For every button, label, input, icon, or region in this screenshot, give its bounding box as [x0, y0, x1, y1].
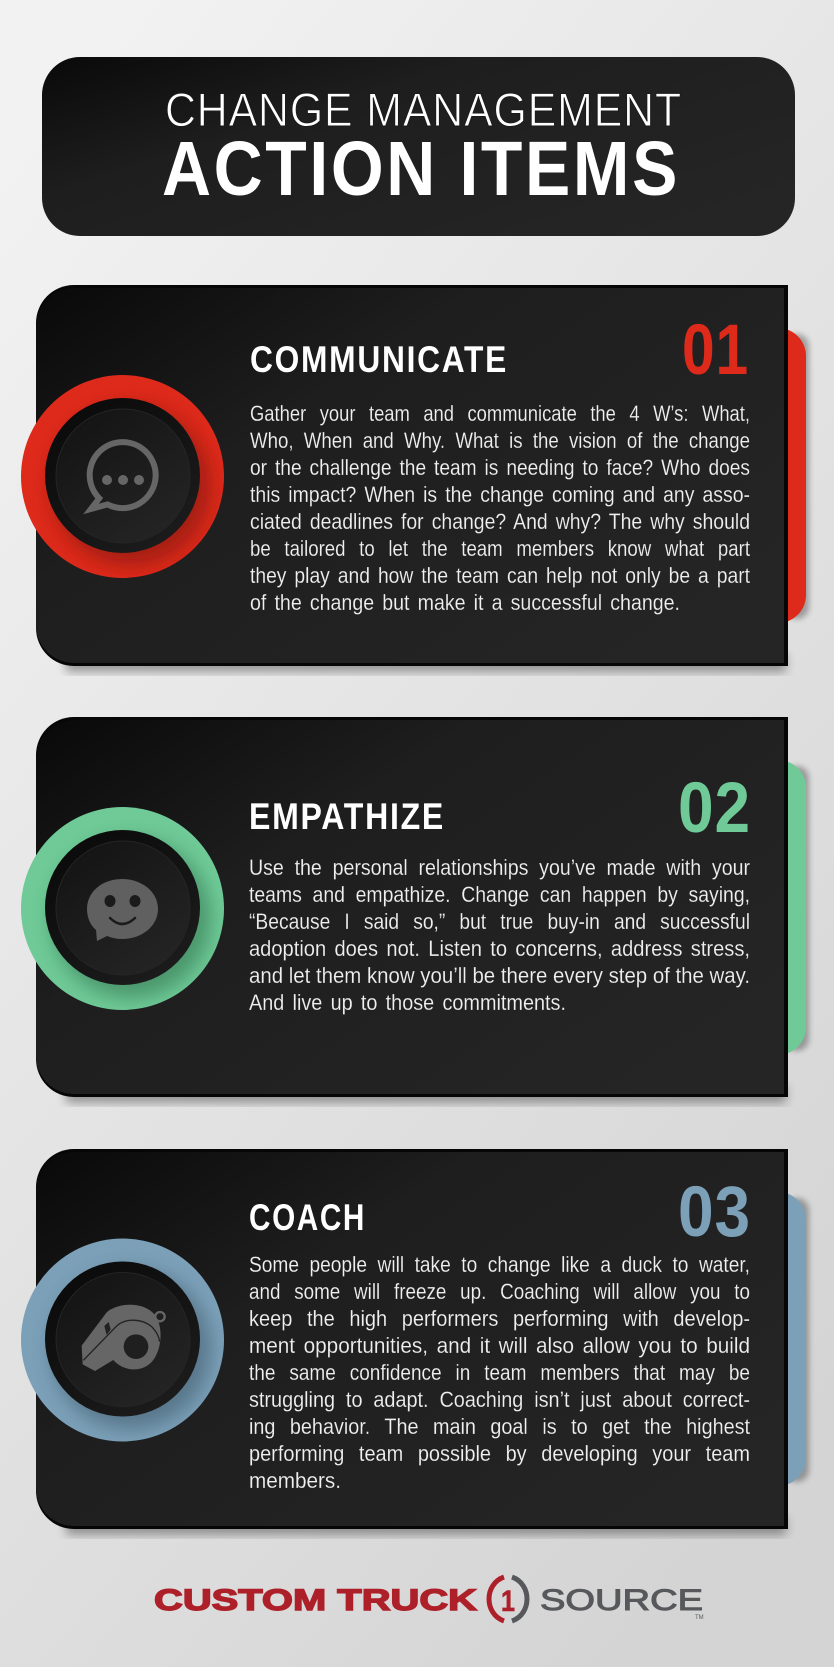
- body text: ing behavior. The main goal is to get the highest: [249, 1414, 750, 1439]
- number 03: 03: [678, 1173, 751, 1252]
- heading: COACH: [249, 1197, 366, 1238]
- title banner: [42, 57, 795, 236]
- icon button: smiling speech bubble: [21, 807, 224, 1010]
- body text: [250, 401, 750, 615]
- icon button: chat bubble: [21, 375, 224, 578]
- body text: Who, When and Why. What is the vision of the change: [250, 428, 750, 453]
- number 01: 01: [682, 311, 749, 390]
- accent tab: [750, 760, 806, 1055]
- body text: and some will freeze up. Coaching will allow you to: [249, 1279, 750, 1304]
- body text: Some people will take to change like a duck to water,: [249, 1252, 750, 1277]
- number 02: 02: [678, 769, 751, 848]
- title: light line: CHANGE MANAGEMENT: [165, 83, 682, 136]
- body text: be tailored to let the team members know what part: [250, 536, 750, 561]
- card: [36, 717, 788, 1097]
- body text: and let them know you’ll be there every step of the way.: [249, 963, 750, 988]
- accent tab: [750, 328, 806, 623]
- card: [36, 1149, 788, 1529]
- body text: performing team possible by developing your team: [249, 1441, 750, 1466]
- panel: empathize: [21, 717, 809, 1103]
- body text: Use the personal relationships you’ve made with your: [249, 855, 750, 880]
- panel: coach: [21, 1149, 809, 1535]
- body text: the same confidence in team members that may be: [249, 1360, 750, 1385]
- logo: Custom Truck One Source: CUSTOM TRUCK: [154, 1584, 477, 1617]
- body text: members.: [249, 1468, 341, 1493]
- logo: Custom Truck One Source: 1: [501, 1585, 515, 1618]
- body text: they play and how the team can help not only be a part: [250, 563, 750, 588]
- body text: And live up to those commitments.: [249, 990, 566, 1015]
- heading: COMMUNICATE: [250, 339, 508, 380]
- body text: ciated deadlines for change? And why? The why should: [250, 509, 750, 534]
- heading: EMPATHIZE: [249, 796, 445, 837]
- body text: Gather your team and communicate the 4 W’s: What,: [250, 401, 750, 426]
- panel: communicate: [21, 285, 809, 672]
- body text: or the challenge the team is needing to face? Who does: [250, 455, 750, 480]
- icon button: whistle: [21, 1238, 224, 1442]
- body text: struggling to adapt. Coaching isn’t just about correct-: [249, 1387, 750, 1412]
- logo: Custom Truck One Source: SOURCE: [540, 1584, 703, 1617]
- body text: keep the high performers performing with develop-: [249, 1306, 750, 1331]
- body text: [249, 1252, 750, 1493]
- logo: Custom Truck One Source: [154, 1577, 704, 1621]
- body text: teams and empathize. Change can happen by saying,: [249, 882, 750, 907]
- body text: of the change but make it a successful change.: [250, 590, 680, 615]
- body text: ment opportunities, and it will also allow you to build: [249, 1333, 750, 1358]
- title: bold line: ACTION ITEMS: [162, 126, 680, 212]
- body text: this impact? When is the change coming and any asso-: [250, 482, 750, 507]
- body text: [249, 855, 750, 1015]
- body text: “Because I said so,” but true buy-in and successful: [249, 909, 750, 934]
- logo: Custom Truck One Source: TM: [695, 1615, 704, 1621]
- card: [36, 285, 788, 666]
- accent tab: [750, 1192, 806, 1486]
- body text: adoption does not. Listen to concerns, address stress,: [249, 936, 750, 961]
